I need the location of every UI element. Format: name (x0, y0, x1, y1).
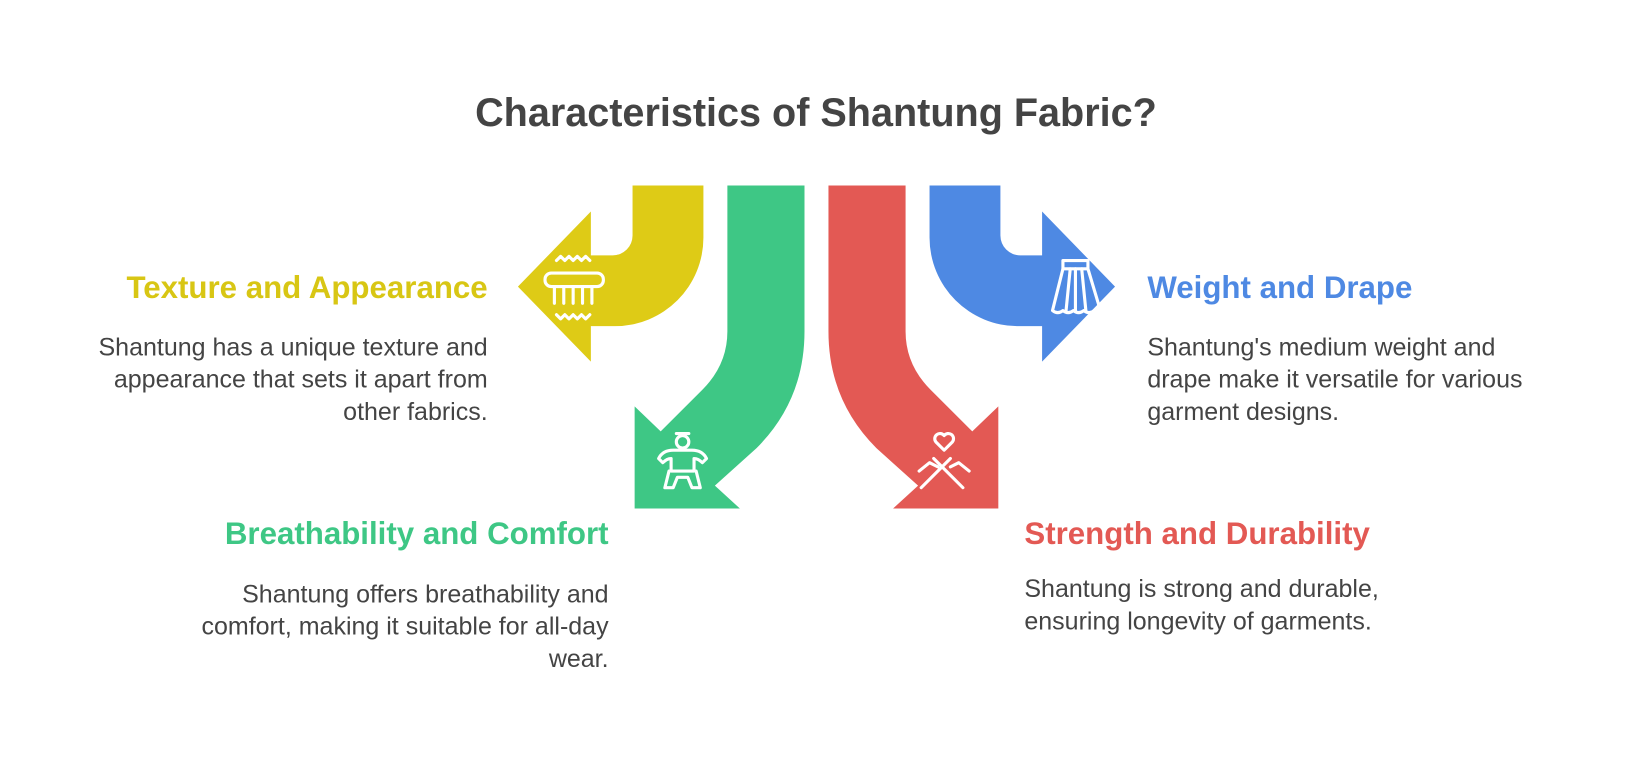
text: weight and drape: Shantung's medium weight and (1147, 333, 1495, 361)
text: texture and appearance: other fabrics. (343, 398, 488, 426)
text: texture and appearance: Texture and Appearance (126, 270, 488, 305)
text: weight and drape: drape make it versatile for various (1147, 366, 1523, 394)
text: breathability and comfort: Shantung offers breathability and (242, 580, 609, 608)
text: weight and drape: garment designs. (1147, 398, 1339, 426)
icon: person (659, 434, 707, 488)
text: weight and drape: Weight and Drape (1147, 270, 1412, 305)
text: breathability and comfort: Breathability and Comfort (225, 516, 609, 551)
text: strength and durability: ensuring longevity of garments. (1024, 607, 1372, 635)
title: Characteristics of Shantung Fabric? (475, 91, 1157, 135)
text: texture and appearance (98, 270, 488, 426)
arrow: red strength (828, 186, 998, 509)
arrow: green breathability (635, 186, 804, 509)
icon: skirt (1053, 261, 1100, 313)
text: breathability and comfort: wear. (548, 645, 609, 673)
text: weight and drape (1147, 270, 1523, 426)
text: breathability and comfort (201, 516, 609, 673)
icon: brush texture (545, 256, 603, 319)
arrow: blue weight (930, 186, 1115, 362)
text: texture and appearance: appearance that sets it apart from (114, 366, 488, 394)
text: strength and durability: Shantung is strong and durable, (1024, 575, 1379, 603)
text: texture and appearance: Shantung has a unique texture and (98, 333, 488, 361)
icon: hands heart (919, 434, 969, 488)
arrow: yellow texture (518, 186, 703, 362)
text: strength and durability (1024, 516, 1379, 635)
text: strength and durability: Strength and Durability (1024, 516, 1371, 551)
text: breathability and comfort: comfort, making it suitable for all-day (201, 613, 609, 641)
